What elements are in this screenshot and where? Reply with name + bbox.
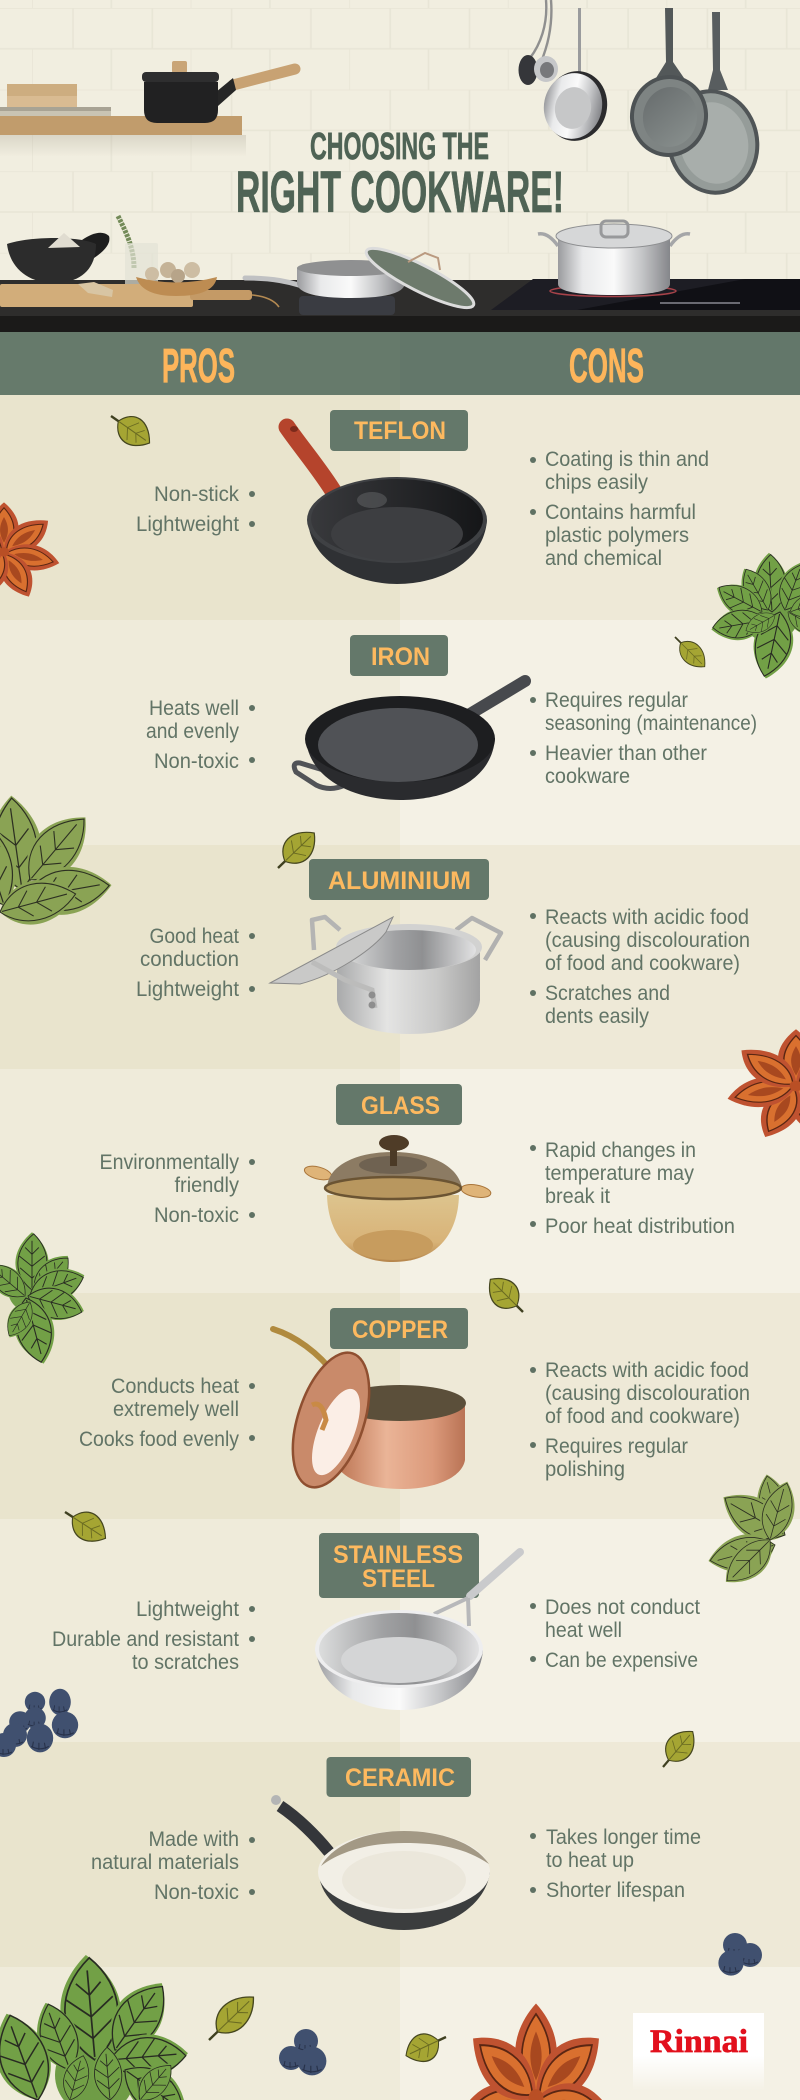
decoration: basil bottom — [0, 1952, 199, 2100]
aluminium pros: Good heat — [150, 925, 239, 948]
stainless cons: Does not conduct — [545, 1596, 700, 1619]
aluminium cons: of food and cookware) — [545, 952, 740, 975]
ceramic pros — [91, 1828, 255, 1904]
aluminium cons: dents easily — [545, 1005, 649, 1028]
title: CHOOSING THE — [310, 126, 489, 168]
aluminium pros: Lightweight — [136, 978, 239, 1001]
glass pros: Non-toxic — [154, 1204, 239, 1227]
bowl of mushrooms — [136, 262, 217, 296]
copper pros: Conducts heat — [111, 1375, 239, 1398]
label: ceramic — [326, 1757, 471, 1797]
decoration: star anise bottom — [452, 2004, 620, 2100]
decoration: bay leaves right — [704, 1471, 800, 1595]
aluminium cons — [530, 906, 750, 1028]
glass pros — [100, 1151, 255, 1227]
glass cons — [530, 1139, 735, 1238]
teflon pros: Non-stick — [154, 483, 239, 506]
chopping board — [0, 282, 279, 307]
teflon cons — [530, 448, 709, 570]
iron pan — [294, 681, 525, 800]
ceramic cons: to heat up — [546, 1849, 634, 1872]
shelf with pot and books — [0, 61, 295, 157]
wooden shelf — [0, 116, 242, 135]
rinnai logo — [633, 2013, 764, 2091]
label: stainless steel: STEEL — [362, 1565, 435, 1593]
iron cons: Requires regular — [545, 689, 688, 712]
copper pros: extremely well — [113, 1398, 239, 1421]
ceramic pros: Non-toxic — [154, 1881, 239, 1904]
label: iron — [350, 635, 448, 676]
label: iron: IRON — [371, 643, 430, 671]
copper cons: polishing — [545, 1458, 625, 1481]
label: stainless steel — [319, 1533, 479, 1598]
rosemary in glass — [118, 216, 158, 287]
ceramic cons — [530, 1826, 701, 1902]
ceramic pan — [271, 1795, 490, 1930]
grey pan front — [625, 8, 713, 162]
saute pan with glass lid — [245, 239, 479, 317]
ceramic pros: Made with — [148, 1828, 239, 1851]
glass pot — [303, 1135, 492, 1262]
copper cons — [530, 1359, 750, 1481]
counter top — [0, 280, 800, 333]
panel: ceramic — [0, 1742, 800, 1967]
ladles — [518, 0, 558, 85]
copper cons: Reacts with acidic food — [545, 1359, 749, 1382]
panel: footer band — [0, 1967, 800, 2100]
label: copper — [330, 1308, 468, 1349]
books and box — [0, 84, 111, 124]
teflon pros — [136, 483, 255, 536]
panel: glass — [0, 1069, 800, 1293]
black saucepan — [142, 61, 295, 123]
stainless pros — [52, 1598, 255, 1674]
copper cons: of food and cookware) — [545, 1405, 740, 1428]
books and box: E FOOD OF THE NORTH — [1, 116, 72, 123]
teflon cons: chips easily — [545, 471, 648, 494]
glass pros: Environmentally — [100, 1151, 239, 1174]
title: RIGHT COOKWARE! — [236, 160, 564, 225]
decoration: basil right top — [709, 552, 800, 683]
panel: stainless steel — [0, 1519, 800, 1742]
aluminium cons: (causing discolouration — [545, 929, 750, 952]
stainless cons: Can be expensive — [545, 1649, 698, 1672]
decoration: berries bottom — [279, 2029, 326, 2075]
teflon pan — [287, 426, 487, 584]
copper cons: Requires regular — [545, 1435, 688, 1458]
teflon cons: and chemical — [545, 547, 662, 570]
grey pan back — [657, 12, 769, 203]
aluminium cons: Scratches and — [545, 982, 670, 1005]
hanging utensils and pans — [518, 0, 769, 203]
decoration: star anise right — [724, 1029, 800, 1143]
cooktop with stock pot — [491, 221, 800, 310]
rinnai logo: Rinnai — [650, 2024, 748, 2060]
label: copper: COPPER — [352, 1316, 448, 1344]
stainless pan — [315, 1552, 520, 1710]
glass cons: temperature may — [545, 1162, 694, 1185]
iron pros — [146, 697, 255, 773]
decoration: bay leaves left — [0, 792, 115, 933]
aluminium cons: Reacts with acidic food — [545, 906, 749, 929]
panel: copper — [0, 1293, 800, 1519]
teflon cons: plastic polymers — [545, 524, 689, 547]
copper pros: Cooks food evenly — [79, 1428, 239, 1451]
stainless cons: heat well — [545, 1619, 622, 1642]
label: ceramic: CERAMIC — [345, 1764, 455, 1792]
glass cons: break it — [545, 1185, 610, 1208]
panel: iron — [0, 620, 800, 845]
decoration: small olive leaves — [58, 404, 712, 2068]
title — [236, 126, 564, 225]
glass pros: friendly — [174, 1174, 239, 1197]
label: glass — [336, 1084, 462, 1125]
stainless cons — [530, 1596, 700, 1672]
ceramic cons: Takes longer time — [546, 1826, 701, 1849]
copper pros — [79, 1375, 255, 1451]
glass cons: Poor heat distribution — [545, 1215, 735, 1238]
iron pros: and evenly — [146, 720, 239, 743]
decoration: star anise left — [0, 502, 63, 602]
aluminium pot with lid — [270, 917, 501, 1034]
stainless pros: to scratches — [132, 1651, 239, 1674]
panel: teflon — [0, 395, 800, 620]
aluminium pros: conduction — [140, 948, 239, 971]
label: aluminium — [309, 859, 489, 900]
decoration: berries left — [0, 1689, 78, 1757]
iron cons: seasoning (maintenance) — [545, 712, 757, 735]
panel: aluminium — [0, 845, 800, 1069]
steel pan — [538, 8, 614, 147]
copper pot with lid — [273, 1329, 466, 1497]
decoration: berries right — [718, 1933, 762, 1976]
teflon cons: Coating is thin and — [545, 448, 709, 471]
glass cons: Rapid changes in — [545, 1139, 696, 1162]
ceramic cons: Shorter lifespan — [546, 1879, 685, 1902]
stainless pros: Durable and resistant — [52, 1628, 239, 1651]
heading: cons: CONS — [569, 340, 644, 393]
mixing bowl — [7, 233, 109, 283]
iron cons: cookware — [545, 765, 630, 788]
label: teflon: TEFLON — [354, 417, 446, 445]
label: aluminium: ALUMINIUM — [328, 867, 471, 895]
header band pros and cons — [0, 332, 800, 395]
ceramic pros: natural materials — [91, 1851, 239, 1874]
panel: kitchen hero scene — [0, 0, 800, 395]
iron pros: Non-toxic — [154, 750, 239, 773]
heading: pros: PROS — [162, 340, 235, 393]
aluminium pros — [136, 925, 255, 1001]
teflon cons: Contains harmful — [545, 501, 696, 524]
iron cons: Heavier than other — [545, 742, 707, 765]
label: stainless steel: STAINLESS — [333, 1541, 463, 1569]
decoration: basil left — [0, 1232, 90, 1369]
label: glass: GLASS — [361, 1092, 440, 1120]
label: teflon — [330, 410, 468, 451]
teflon pros: Lightweight — [136, 513, 239, 536]
copper cons: (causing discolouration — [545, 1382, 750, 1405]
stainless pros: Lightweight — [136, 1598, 239, 1621]
iron cons — [530, 689, 757, 788]
iron pros: Heats well — [149, 697, 239, 720]
